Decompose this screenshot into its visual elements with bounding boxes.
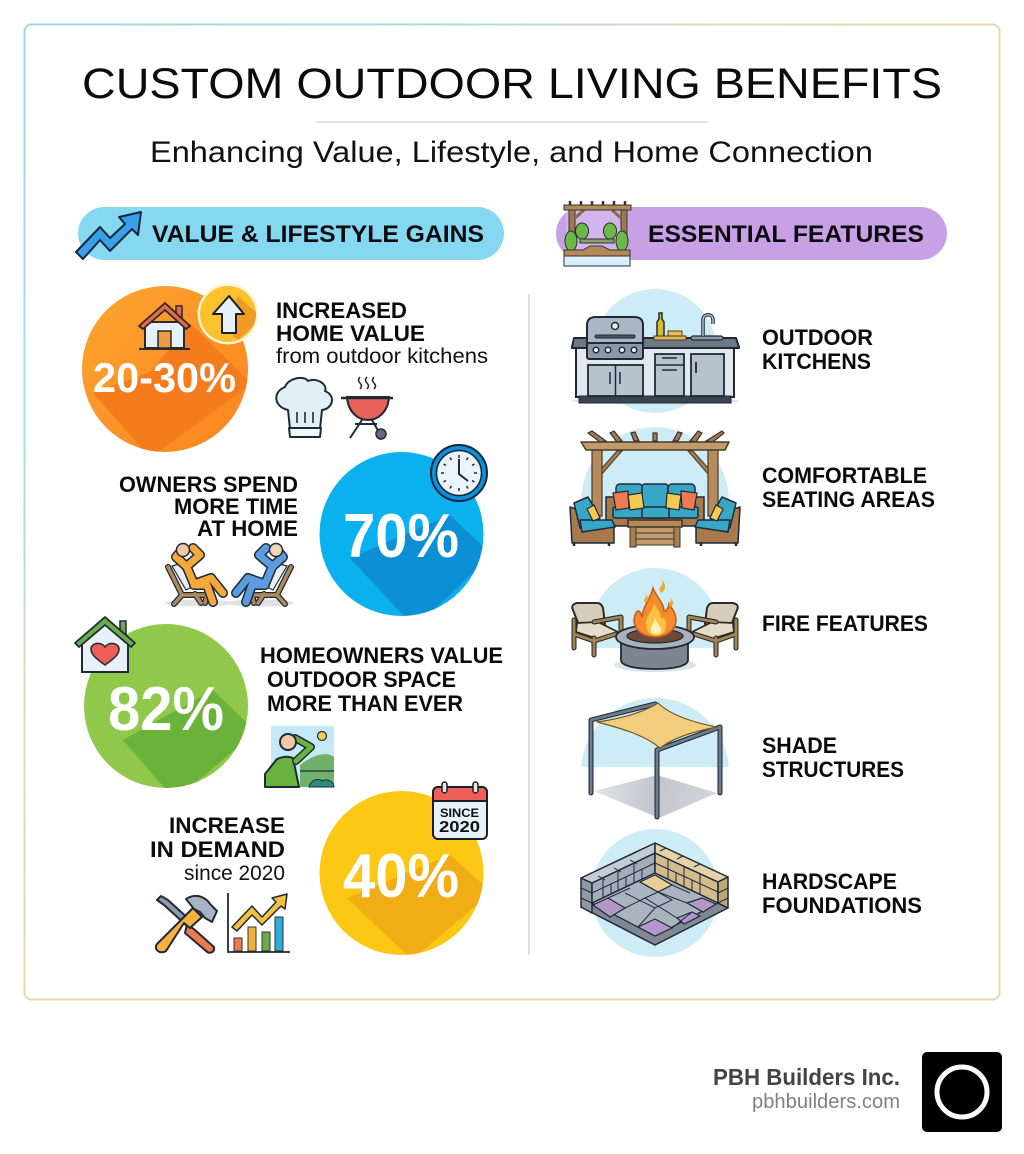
value: 82% <box>108 675 224 744</box>
stat: 40% increase in demand <box>150 782 492 960</box>
icon: calendar since 2020: 2020 <box>439 819 480 836</box>
label: HARDSCAPE <box>762 869 897 894</box>
heading: essential features <box>556 201 947 266</box>
label: COMFORTABLE <box>762 463 927 488</box>
right wall <box>655 843 728 908</box>
label: HOME VALUE <box>276 321 425 346</box>
feature: shade structures <box>581 698 904 820</box>
stat: 70% spend more time at home <box>119 445 492 628</box>
label: since 2020 <box>184 862 285 885</box>
label: SHADE <box>762 733 837 758</box>
icon: rising arrow <box>76 212 141 259</box>
label: FOUNDATIONS <box>762 893 922 918</box>
person right <box>236 544 291 604</box>
stat: 20-30% home value <box>82 284 488 458</box>
icon: shade sail <box>581 698 729 820</box>
heading: value and lifestyle gains <box>76 207 504 260</box>
icon: up arrow badge <box>198 284 262 344</box>
sofa <box>606 484 704 526</box>
label <box>762 463 935 512</box>
label: OUTDOOR <box>762 325 873 350</box>
left wall <box>581 843 655 913</box>
yellow circle <box>320 791 492 960</box>
label: IN DEMAND <box>150 837 285 862</box>
icon: tools <box>156 896 217 953</box>
title: CUSTOM OUTDOOR LIVING BENEFITS <box>82 60 942 108</box>
label: OUTDOOR SPACE <box>267 667 456 692</box>
coffee table <box>628 520 682 547</box>
label: from outdoor kitchens <box>276 345 488 368</box>
value: 70% <box>343 502 459 571</box>
heading: essential features: ESSENTIAL FEATURES <box>648 221 924 248</box>
label <box>119 472 298 541</box>
feature: hardscape foundations <box>581 829 922 957</box>
icon: calendar since 2020: SINCE <box>440 806 479 820</box>
footer logo <box>922 1052 1002 1132</box>
label <box>762 869 922 918</box>
icon: fire pit with chairs <box>571 568 739 672</box>
footer brand text: pbhbuilders.com <box>752 1091 900 1113</box>
orange circle <box>82 286 252 458</box>
icon: house with heart <box>75 617 135 672</box>
label <box>150 813 285 885</box>
left armchair <box>570 497 615 546</box>
icon: house <box>139 303 190 349</box>
icon: pergola lounge <box>569 427 741 548</box>
label <box>762 325 873 374</box>
subtitle: Enhancing Value, Lifestyle, and Home Connection <box>150 136 873 169</box>
label: KITCHENS <box>762 349 871 374</box>
footer brand text: PBH Builders Inc. <box>713 1064 900 1090</box>
label: INCREASE <box>169 813 285 838</box>
feature: outdoor kitchens <box>571 289 873 413</box>
label: MORE THAN EVER <box>267 691 463 716</box>
label: INCREASED <box>276 298 407 323</box>
label: SEATING AREAS <box>762 487 935 512</box>
icon: person viewing landscape <box>265 726 334 787</box>
icon: two people relaxing <box>165 544 294 606</box>
icon: chef hat <box>276 378 332 437</box>
label: HOMEOWNERS VALUE <box>260 643 503 668</box>
label: OWNERS SPEND <box>119 472 298 497</box>
heading: value and lifestyle gains: VALUE & LIFESTYLE GAINS <box>152 221 484 248</box>
value: 40% <box>343 842 459 911</box>
right armchair <box>695 497 740 546</box>
icon: calendar since 2020 <box>433 782 487 839</box>
footer brand text <box>713 1064 900 1113</box>
label: STRUCTURES <box>762 757 904 782</box>
green circle <box>84 624 248 788</box>
label: AT HOME <box>197 516 298 541</box>
person left <box>168 544 223 604</box>
label <box>762 733 904 782</box>
icon: pergola and patio <box>564 201 631 266</box>
label: FIRE FEATURES <box>762 611 928 636</box>
blue circle <box>320 452 484 616</box>
label <box>276 298 488 368</box>
feature: comfortable seating areas <box>569 427 934 548</box>
icon: barbecue grill <box>341 377 393 439</box>
feature: fire features <box>571 568 928 672</box>
icon: clock <box>431 445 487 501</box>
stat: 82% value outdoor space <box>75 617 503 800</box>
label: MORE TIME <box>174 494 298 519</box>
label <box>260 643 503 716</box>
value: 20-30% <box>93 354 236 401</box>
icon: isometric pavers and walls <box>581 829 728 957</box>
icon: outdoor kitchen <box>571 289 739 413</box>
icon: growth bar chart <box>228 893 290 952</box>
